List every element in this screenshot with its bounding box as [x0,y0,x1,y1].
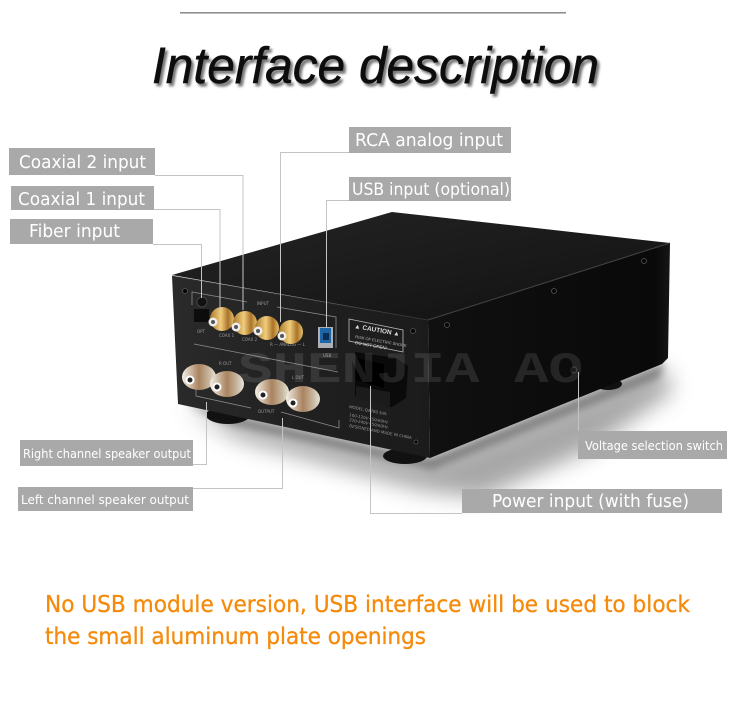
product photo: amplifier rear view [172,212,672,498]
caution label [349,319,407,352]
side panel [428,243,670,458]
caution label: RISK OF ELECTRIC SHOCK [355,334,407,348]
floor shadow [185,368,672,498]
label: right channel speaker output [20,440,193,466]
RCA jacks [208,307,303,344]
voltage switch [571,367,577,373]
speaker binding posts [182,364,320,412]
watermark: SHENJIA AO [238,346,583,396]
input bracket lines [192,292,339,428]
title: Interface description [152,37,599,94]
label: USB input: USB input (optional) [352,180,510,200]
optical port [194,297,209,322]
label: fiber input [10,219,153,244]
input labels on panel: L OUT [292,375,305,380]
label: coaxial 2 input: Coaxial 2 input [19,153,146,173]
label: right channel speaker output: Right channel speaker output [23,446,191,461]
USB port [318,327,333,348]
input labels on panel: OPT [197,329,206,334]
feet [206,378,622,464]
model text: 220-240V~50/60Hz [349,417,388,430]
model text: MODEL:QA780 S/N: [349,404,388,416]
input labels on panel: COAX 1 [219,333,235,338]
input labels on panel [197,301,331,414]
top face [172,212,670,320]
power socket [355,352,408,407]
note text [45,592,691,650]
label: fiber input: Fiber input [29,222,120,242]
label: left channel speaker output: Left channel speaker output [21,492,189,507]
back panel [172,276,430,458]
label: voltage selection switch: Voltage selection switch [585,438,723,453]
model text: DESIGNED AND MADE IN CHINA [349,423,412,440]
leader lines [153,152,578,514]
caution label: ▲ CAUTION ▲ [354,323,400,338]
top divider line [180,12,566,14]
label: coaxial 2 input [9,148,155,175]
input labels on panel: USB [323,353,331,358]
label: coaxial 1 input: Coaxial 1 input [18,190,145,210]
label: voltage selection switch [578,431,727,459]
label: power input: Power input (with fuse) [492,491,689,512]
edge highlight [428,243,670,320]
note text: the small aluminum plate openings [45,624,426,650]
note text: No USB module version, USB interface will be used to block [45,592,691,618]
input labels on panel: INPUT [257,301,270,306]
input labels on panel: COAX 2 [242,337,258,342]
model text [349,404,412,440]
label: RCA analog input: RCA analog input [355,130,503,151]
input labels on panel: R OUT [219,361,232,366]
input labels on panel: OUTPUT [258,409,275,414]
label: left channel speaker output [18,487,193,511]
model text: 100-120V~50/60Hz [349,412,388,425]
input labels on panel: R — ANALOG — L [270,342,306,347]
screws [182,258,646,444]
caution label: DO NOT OPEN! [355,340,387,351]
